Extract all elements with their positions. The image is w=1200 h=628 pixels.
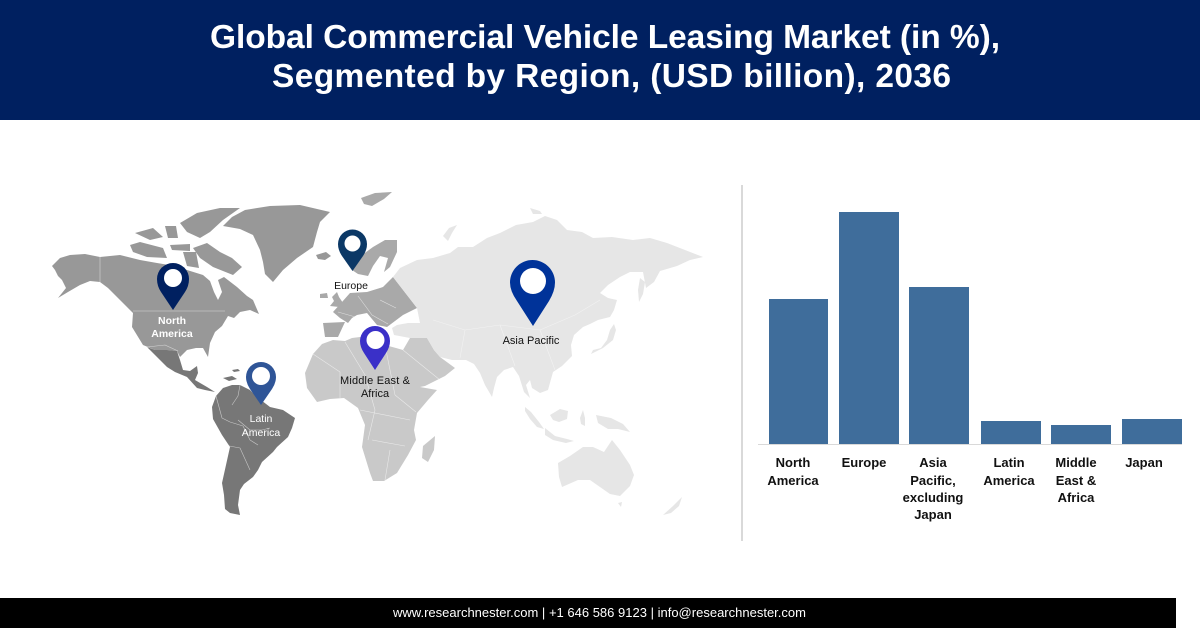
footer bar bbox=[0, 598, 1176, 628]
label: Middle East and Africa: Africa bbox=[361, 388, 390, 400]
label: Latin America: Latin bbox=[250, 413, 273, 425]
pin: North America bbox=[157, 263, 189, 310]
bars bbox=[769, 212, 1182, 444]
pin: Middle East and Africa bbox=[360, 326, 390, 370]
label: Latin America bbox=[242, 413, 280, 439]
axis labels: Japan bbox=[914, 507, 952, 522]
country borders bbox=[100, 257, 440, 480]
label: North America: America bbox=[151, 328, 193, 340]
world map bbox=[52, 192, 703, 515]
axis labels: excluding bbox=[903, 490, 963, 505]
axis labels: Africa bbox=[1058, 490, 1095, 505]
axis labels: America bbox=[767, 473, 819, 488]
pin: Latin America bbox=[246, 362, 276, 405]
region: Europe bbox=[320, 192, 417, 337]
region: North America bbox=[52, 205, 331, 357]
region: Asia Pacific bbox=[392, 208, 703, 515]
label: Latin America: America bbox=[242, 427, 280, 439]
header banner bbox=[0, 0, 1200, 120]
label: North America bbox=[151, 315, 193, 340]
vertical divider bbox=[741, 185, 743, 541]
label: North America: North bbox=[158, 315, 186, 327]
label: Europe: Europe bbox=[334, 280, 368, 292]
title bbox=[210, 19, 1000, 95]
axis labels: America bbox=[983, 473, 1035, 488]
bar chart bbox=[758, 212, 1182, 522]
axis labels: Middle bbox=[1055, 455, 1097, 470]
axis labels bbox=[767, 455, 1163, 522]
axis baseline bbox=[758, 444, 1182, 445]
title: Segmented by Region, (USD billion), 2036 bbox=[272, 58, 951, 95]
title: Global Commercial Vehicle Leasing Market (in %), bbox=[210, 19, 1000, 56]
axis labels: Japan bbox=[1125, 455, 1163, 470]
axis labels: Pacific, bbox=[910, 473, 956, 488]
pin: Europe bbox=[338, 229, 367, 271]
axis labels: Asia bbox=[919, 455, 947, 470]
axis labels: Latin bbox=[993, 455, 1025, 470]
axis labels: East & bbox=[1056, 473, 1096, 488]
region: Middle East and Africa bbox=[305, 337, 455, 481]
region: Latin America bbox=[147, 347, 295, 515]
label: Middle East and Africa bbox=[340, 375, 411, 400]
contact line: www.researchnester.com | +1 646 586 9123 | info@researchnester.com bbox=[392, 605, 806, 620]
pin: Asia Pacific bbox=[510, 260, 555, 326]
axis labels: North bbox=[776, 455, 810, 470]
label: Middle East and Africa: Middle East & bbox=[340, 375, 411, 387]
axis labels: Europe bbox=[842, 455, 886, 470]
label: Asia Pacific: Asia Pacific bbox=[503, 335, 560, 347]
